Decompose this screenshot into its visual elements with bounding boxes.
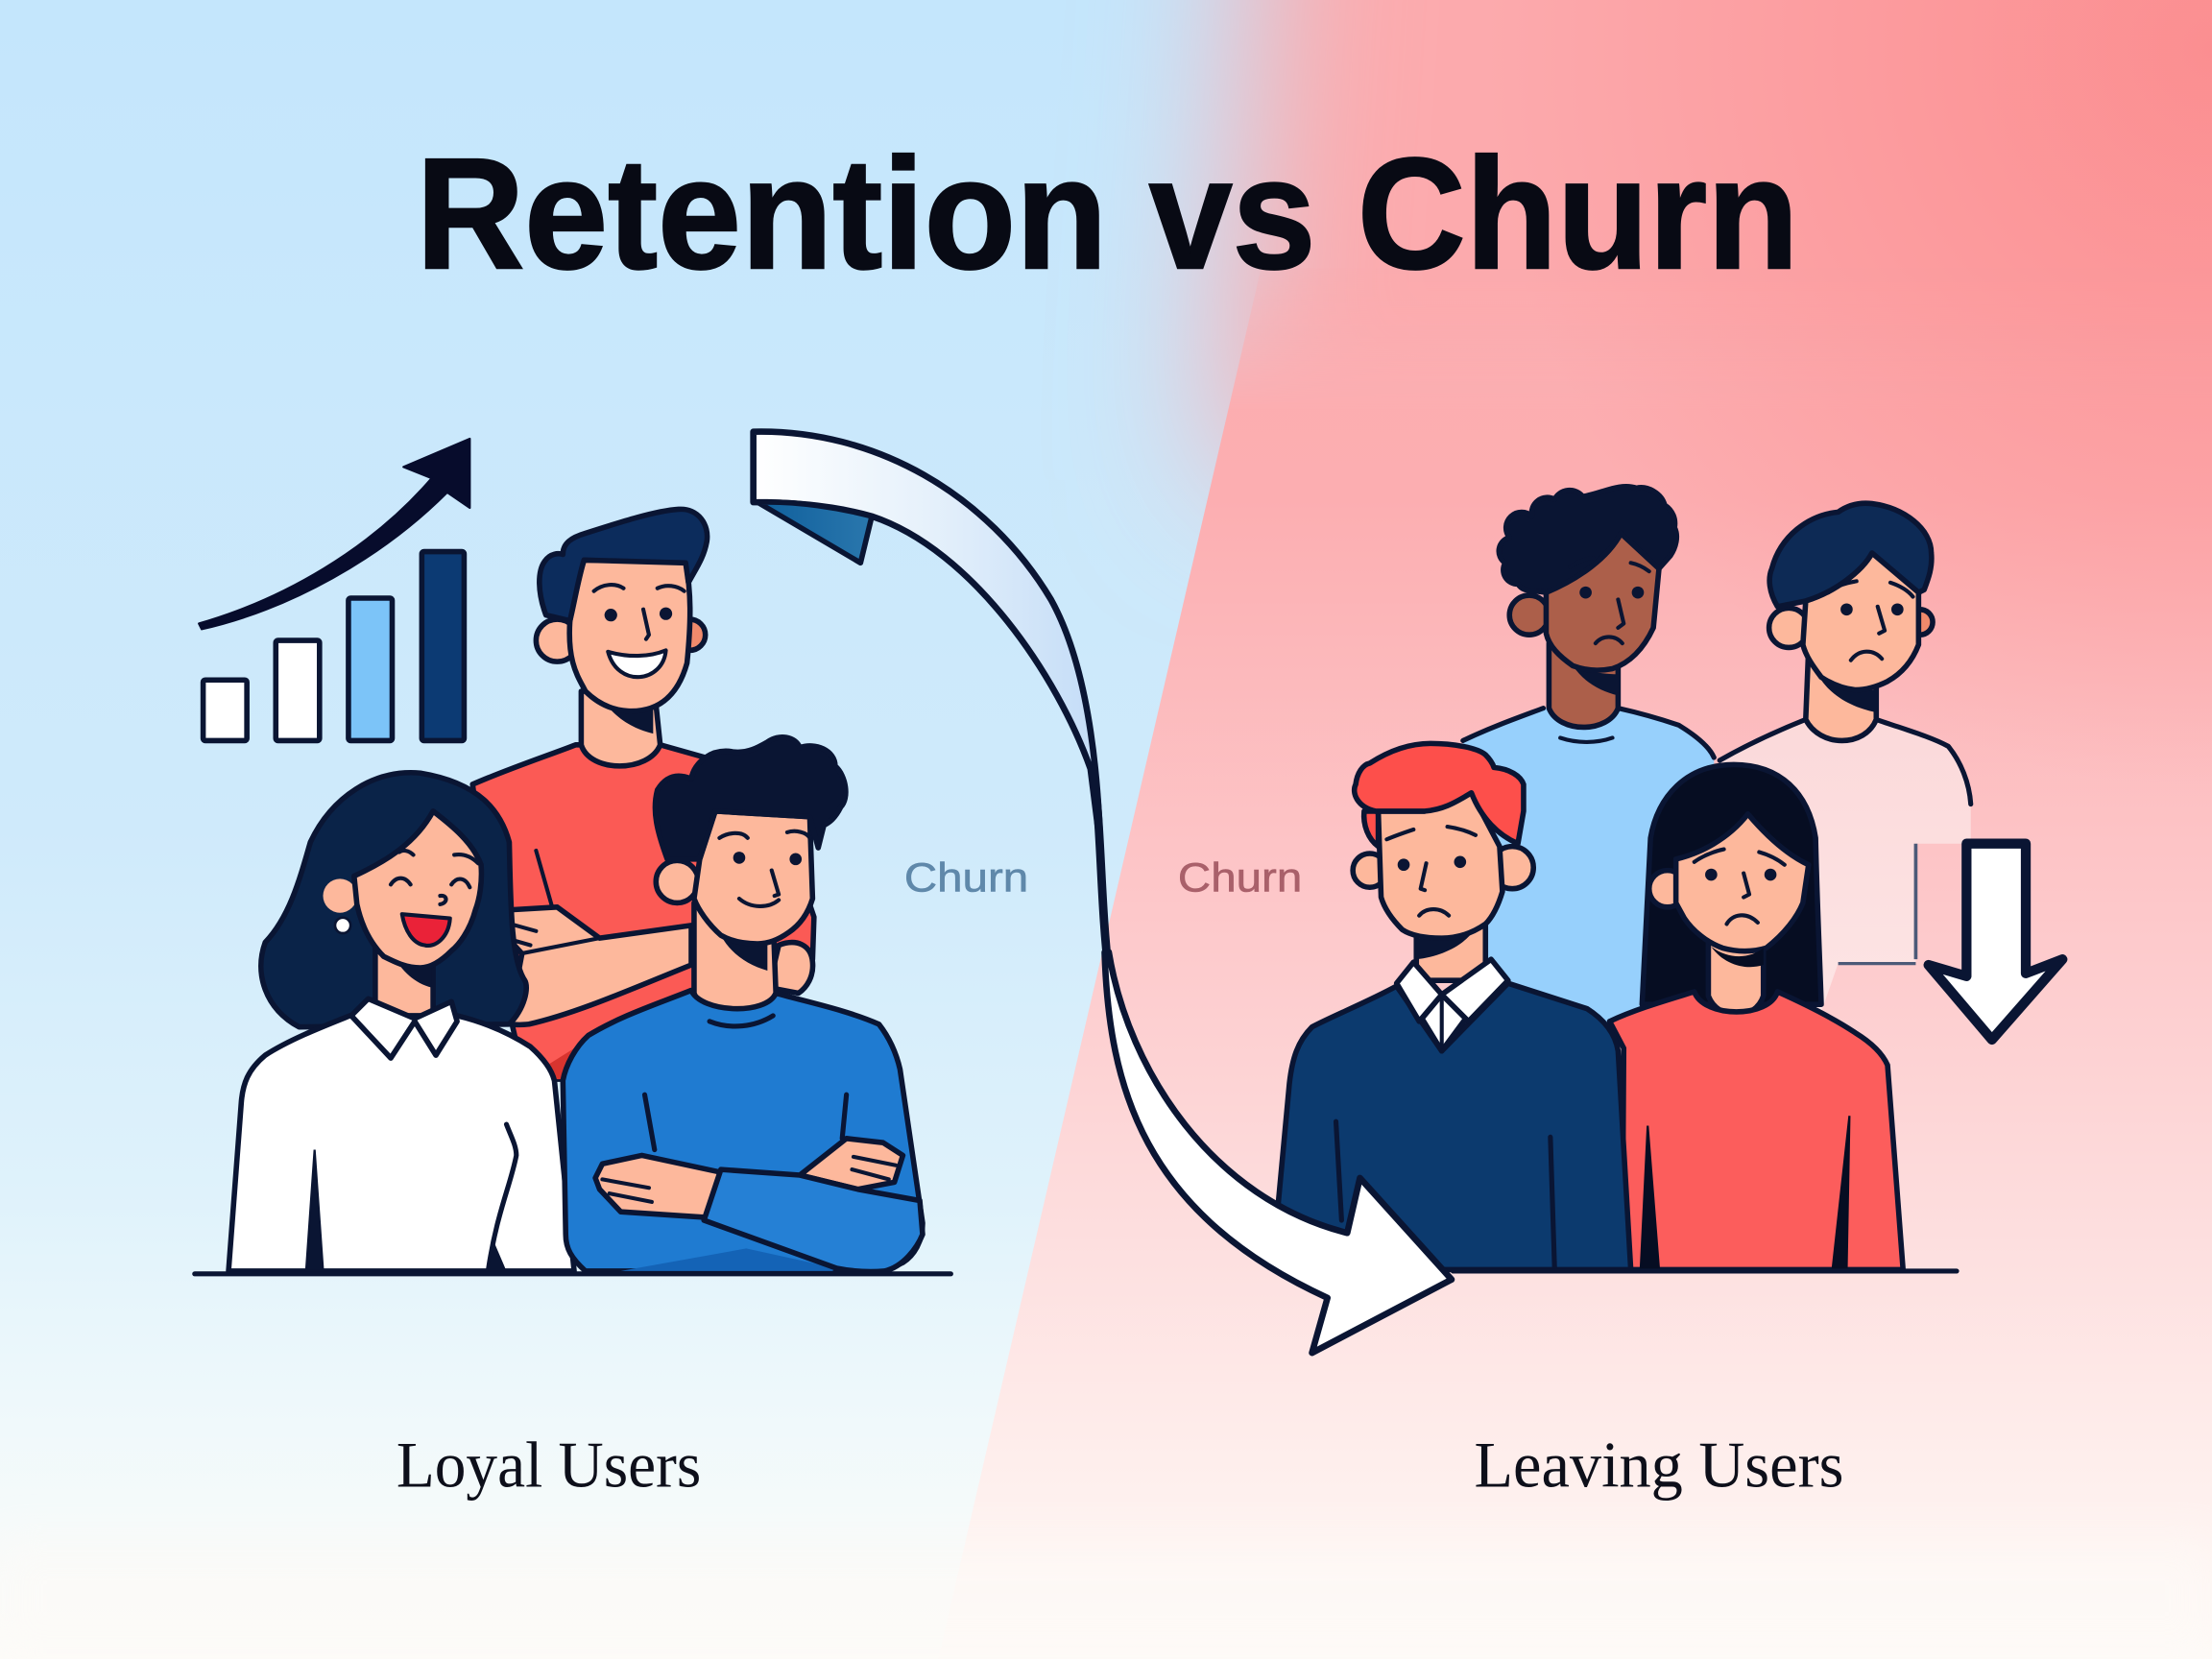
icon: down arrow [1929,844,2062,1040]
ground line: leaving users [1453,1269,1957,1273]
label: Loyal Users: Loyal Users [397,1430,701,1502]
leaving user: sad woman in red sweater [1610,764,1903,1269]
leaving user: man with dark skin in light blue shirt [1453,487,1714,1037]
growth bar chart icon [199,439,469,740]
ground line: loyal users [195,1272,950,1276]
loyal user: smiling man in blue sweater [563,737,923,1271]
leaving user: red-haired man in navy sweater [1277,743,1631,1269]
icon: rising trend arrow [199,439,469,629]
crossed arm [508,907,691,1024]
leaving user: man with navy hair in pale shirt (fading) [1714,503,1971,1016]
crossed arms [595,1155,721,1217]
label: Leaving Users: Leaving Users [1475,1430,1843,1502]
loyal user: laughing woman in white shirt [228,773,574,1271]
label: Churn (red side): Churn [1178,855,1302,902]
curved churn arrow between groups [754,432,1452,1353]
label: Churn (blue side): Churn [904,855,1028,902]
title: Retention vs Churn [416,125,1798,301]
loyal user: man in red shirt (back) [472,509,814,1079]
